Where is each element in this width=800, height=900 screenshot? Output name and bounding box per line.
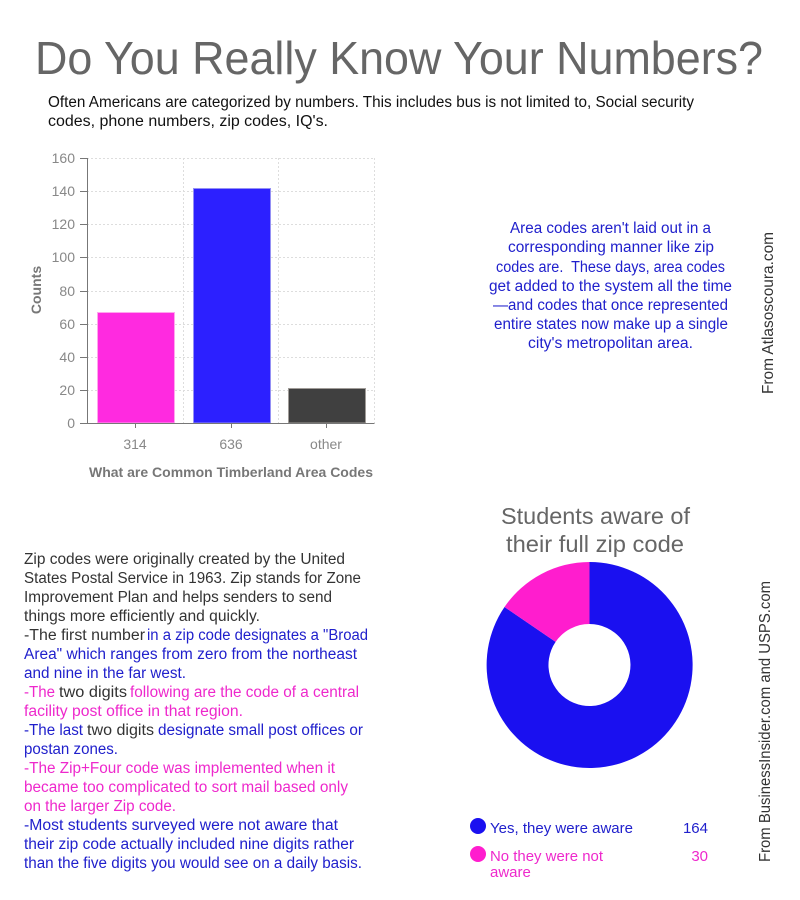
zip code explanation text: in a zip code designates a "Broad: [147, 627, 368, 644]
title: Do You Really Know Your Numbers?: [35, 32, 763, 84]
zip code explanation text: [24, 551, 368, 872]
intro text block: [48, 94, 694, 130]
zip code explanation text: became too complicated to sort mail based only: [24, 779, 348, 796]
area code explanation text: Area codes aren't laid out in a: [510, 220, 711, 237]
y-axis tick labels: 80: [59, 283, 75, 299]
x-axis tick labels: other: [310, 436, 342, 452]
donut chart title: Students aware of: [501, 503, 691, 529]
intro text block: codes, phone numbers, zip codes, IQ's.: [48, 113, 328, 130]
legend: [470, 818, 708, 881]
y-axis tick labels: 100: [52, 249, 75, 265]
donut chart title: their full zip code: [506, 531, 684, 557]
zip code explanation text: and nine in the far west.: [24, 665, 186, 682]
donut chart: student awareness: [487, 562, 693, 768]
legend item: yes: Yes, they were aware: [490, 820, 633, 837]
area code explanation text: codes are. These days, area codes: [496, 259, 725, 276]
y-axis tick labels: 120: [52, 216, 75, 232]
zip code explanation text: designate small post offices or: [158, 722, 363, 739]
legend item: no: No they were not: [490, 848, 604, 865]
area code explanation text: corresponding manner like zip: [508, 239, 714, 256]
y-axis tick labels: 160: [52, 150, 75, 166]
area code explanation text: city's metropolitan area.: [528, 335, 693, 352]
zip code explanation text: -Most students surveyed were not aware that: [24, 817, 339, 834]
bar: 314: [98, 312, 174, 423]
zip code explanation text: -The first number: [24, 627, 145, 644]
x-axis tick labels: [123, 436, 342, 452]
y-axis title: Counts: [28, 266, 44, 314]
area code explanation text: —and codes that once represented: [493, 297, 728, 314]
zip code explanation text: two digits: [59, 684, 127, 701]
intro text block: Often Americans are categorized by numbers. This includes bus is not limited to, Social security: [48, 94, 694, 111]
legend item: no: aware: [490, 864, 531, 881]
zip code explanation text: Zip codes were originally created by the United: [24, 551, 345, 568]
bar chart: common Timberland area codes: [28, 150, 374, 480]
area code explanation text: entire states now make up a single: [494, 316, 728, 333]
axes: [80, 158, 374, 428]
zip code explanation text: States Postal Service in 1963. Zip stands for Zone: [24, 570, 361, 587]
zip code explanation text: their zip code actually included nine digits rather: [24, 836, 354, 853]
source: Atlasoscoura: From Atlasoscoura.com: [760, 232, 777, 394]
legend item: yes: 164: [683, 820, 708, 837]
zip code explanation text: things more efficiently and quickly.: [24, 608, 260, 625]
bar: other: [288, 388, 366, 423]
legend item: yes: [470, 818, 708, 837]
zip code explanation text: facility post office in that region.: [24, 703, 243, 720]
y-axis tick labels: 0: [67, 415, 75, 431]
bar: 636: [194, 188, 270, 423]
source: BusinessInsider and USPS: From BusinessInsider.com and USPS.com: [757, 581, 774, 862]
zip code explanation text: on the larger Zip code.: [24, 798, 176, 815]
zip code explanation text: than the five digits you would see on a daily basis.: [24, 855, 362, 872]
y-axis tick labels: 20: [59, 382, 75, 398]
zip code explanation text: Area" which ranges from zero from the northeast: [24, 646, 358, 663]
donut chart title: [501, 503, 691, 557]
zip code explanation text: postan zones.: [24, 741, 118, 758]
zip code explanation text: Improvement Plan and helps senders to send: [24, 589, 332, 606]
y-axis tick labels: 40: [59, 349, 75, 365]
area code explanation text: [489, 220, 732, 352]
x-axis tick labels: 636: [219, 436, 243, 452]
y-axis tick labels: [52, 150, 75, 431]
zip code explanation text: -The: [24, 684, 55, 701]
zip code explanation text: -The Zip+Four code was implemented when it: [24, 760, 336, 777]
x-axis title: What are Common Timberland Area Codes: [89, 464, 373, 480]
zip code explanation text: -The last: [24, 722, 84, 739]
legend item: no: [470, 846, 708, 881]
area code explanation text: get added to the system all the time: [489, 278, 732, 295]
slice: not aware: [504, 562, 590, 642]
y-axis tick labels: 140: [52, 183, 75, 199]
y-axis tick labels: 60: [59, 316, 75, 332]
legend item: no: 30: [691, 848, 708, 865]
zip code explanation text: two digits: [87, 722, 154, 739]
slice: yes, aware: [487, 562, 693, 768]
zip code explanation text: following are the code of a central: [130, 684, 359, 701]
x-axis tick labels: 314: [123, 436, 147, 452]
